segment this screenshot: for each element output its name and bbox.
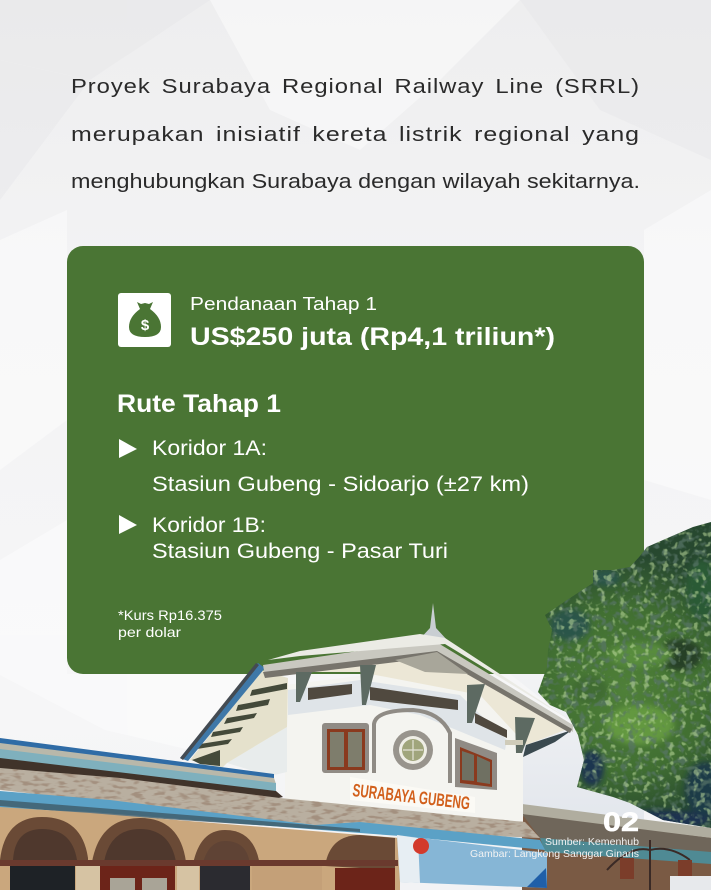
- vent bands: [308, 684, 507, 738]
- teal fascia: [0, 791, 545, 850]
- left wall: [0, 807, 400, 890]
- icon: arrow 1B: [119, 515, 137, 534]
- right window: [455, 738, 497, 790]
- source credit: [470, 836, 639, 860]
- pillar bits: [505, 740, 523, 745]
- exchange rate footnote: *Kurs Rp16.375: [118, 607, 222, 623]
- left window: [322, 723, 369, 773]
- panel: funding and route: [67, 246, 644, 674]
- station sign: [350, 777, 475, 813]
- intro paragraph: merupakan inisiatif kereta listrik regional yang: [71, 123, 640, 146]
- photo: tree: [530, 520, 711, 840]
- wall shadow below eaves: [288, 680, 507, 750]
- right low roof: [522, 804, 711, 890]
- lower tile roof: [0, 768, 540, 838]
- corridor 1B: Koridor 1B:: [152, 514, 266, 537]
- banner: [397, 835, 547, 888]
- route heading: Rute Tahap 1: [117, 390, 281, 418]
- intro paragraph: [71, 75, 640, 193]
- ridge roof fascia: [263, 640, 573, 732]
- arches: [0, 817, 398, 890]
- source credit: Gambar: Langkong Sanggar Ginaris: [470, 848, 639, 860]
- station sign: SURABAYA GUBENG: [352, 780, 471, 813]
- roof finial: [268, 603, 573, 722]
- roof rake blue: [180, 663, 265, 761]
- intro paragraph: Proyek Surabaya Regional Railway Line (SRRL): [71, 75, 640, 98]
- icon: money bag: [118, 293, 171, 347]
- source credit: Sumber: Kemenhub: [545, 836, 639, 848]
- photo: sky patch right of the station: [510, 674, 644, 830]
- photo: Surabaya Gubeng station: [0, 603, 711, 890]
- soffit: [288, 654, 565, 745]
- left upper blue-edged roof: [0, 738, 283, 800]
- corridor 1A: Stasiun Gubeng - Sidoarjo (±27 km): [152, 473, 529, 496]
- intro paragraph: menghubungkan Surabaya dengan wilayah sekitarnya.: [71, 170, 640, 193]
- icon: money bag: $: [141, 317, 150, 334]
- corridor 1A: [152, 437, 529, 496]
- corridor 1B: [152, 514, 448, 563]
- corridor 1B: Stasiun Gubeng - Pasar Turi: [152, 540, 448, 563]
- upper building wall: [285, 665, 523, 822]
- funding label: Pendanaan Tahap 1: [190, 294, 377, 314]
- exchange rate footnote: [118, 607, 222, 640]
- left eave dark rafters: [192, 683, 287, 766]
- funding amount: US$250 juta (Rp4,1 triliun*): [190, 323, 555, 351]
- side gable wall: [227, 727, 287, 776]
- corridor 1A: Koridor 1A:: [152, 437, 267, 460]
- gable ornament: [395, 652, 468, 674]
- arch molding: [374, 710, 450, 783]
- brackets: [296, 665, 535, 753]
- page number: 02: [603, 807, 639, 837]
- round window: [393, 730, 433, 770]
- icon: arrow 1A: [119, 439, 137, 458]
- exchange rate footnote: per dolar: [118, 624, 181, 640]
